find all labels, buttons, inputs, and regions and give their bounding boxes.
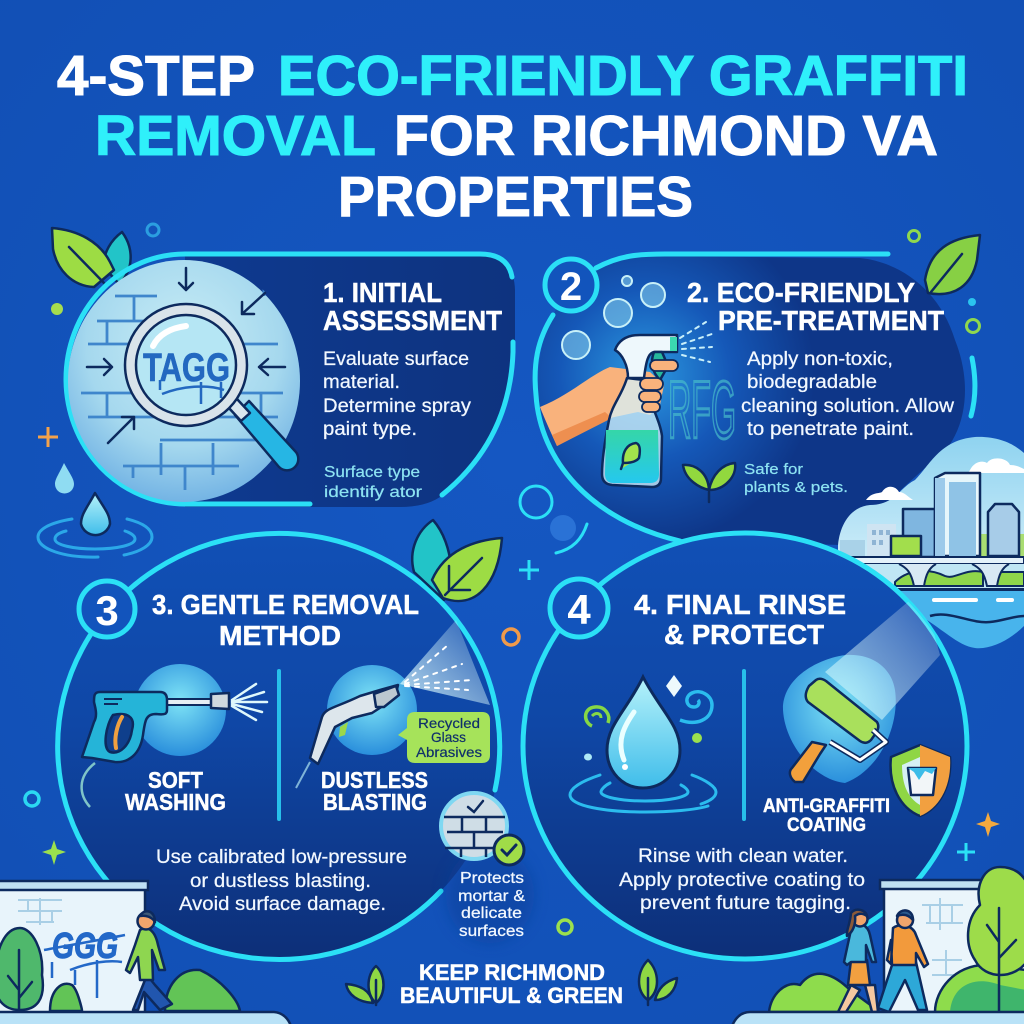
- icon: sprout: [683, 463, 735, 502]
- title: 4-STEP: [57, 44, 255, 108]
- bushes: [50, 970, 240, 1011]
- heading: 4. FINAL RINSE: [634, 589, 846, 620]
- decorative icons: rings, dots and sparkles: [25, 224, 1000, 934]
- heading: 2. ECO-FRIENDLY: [687, 277, 915, 308]
- wall: [0, 881, 148, 1014]
- person with ponytail: [838, 910, 878, 1012]
- panel outline: [535, 254, 975, 541]
- slogan text: BEAUTIFUL & GREEN: [400, 983, 623, 1008]
- graffiti tag in lens: TAGG: [143, 346, 230, 390]
- clean wall: [880, 880, 1024, 1012]
- body text: Use calibrated low-pressure: [156, 847, 407, 868]
- body text: cleaning solution. Allow: [741, 396, 954, 417]
- panel: step 2 eco-friendly pre-treatment: RFG: [668, 365, 736, 456]
- wall graffiti: GGG: [52, 925, 118, 966]
- callout: protects mortar and delicate surfaces: [441, 793, 534, 943]
- callout: protects mortar and delicate surfaces: surfaces: [459, 923, 524, 940]
- body text: Determine spray: [323, 396, 472, 417]
- body text: [619, 846, 865, 914]
- panel outline: [66, 254, 513, 504]
- scene: left graffiti wall with walker: [0, 881, 291, 1024]
- body text: biodegradable: [747, 372, 877, 393]
- panel outline: [523, 533, 967, 959]
- method labels: WASHING: [125, 789, 226, 815]
- method labels: SOFT: [148, 767, 203, 793]
- icon: soft washing pressure gun: [82, 664, 267, 807]
- slogan text: KEEP RICHMOND: [419, 960, 605, 985]
- icon: water drops and ripples: [38, 463, 152, 557]
- body text: Evaluate surface: [323, 349, 469, 370]
- badge: number 3: 3: [95, 587, 119, 634]
- panel background: [58, 533, 500, 959]
- coating label: COATING: [787, 815, 866, 836]
- badge: number 2: 2: [560, 265, 582, 309]
- panel: step 3 gentle removal method: [58, 533, 500, 959]
- heading: 3. GENTLE REMOVAL: [152, 589, 419, 620]
- callout text: Surface type: [324, 464, 420, 481]
- callout: protects mortar and delicate surfaces: Protects: [460, 870, 524, 887]
- body text: Avoid surface damage.: [179, 894, 386, 915]
- person walking: [126, 911, 172, 1010]
- scene: right clean wall with walkers: [732, 867, 1024, 1024]
- title: [57, 44, 968, 229]
- heading: [687, 277, 944, 336]
- callout text: plants & pets.: [744, 479, 848, 496]
- tree: [0, 928, 43, 1010]
- callout text: [744, 461, 848, 496]
- panel outline: [58, 533, 500, 959]
- method labels: [125, 767, 428, 815]
- body text: or dustless blasting.: [190, 871, 371, 892]
- body text: Apply non-toxic,: [747, 349, 893, 370]
- heading: 1. INITIAL: [323, 277, 442, 308]
- body text: prevent future tagging.: [640, 893, 851, 914]
- ground: [732, 1012, 1024, 1024]
- badge: number 3: [79, 581, 135, 637]
- body text: [323, 349, 472, 440]
- panel background: [185, 254, 515, 507]
- panel background: [523, 533, 967, 959]
- slogan text: [400, 960, 623, 1008]
- body text: to penetrate paint.: [747, 419, 914, 440]
- badge: number 2: [545, 259, 597, 311]
- callout: recycled glass abrasives: Recycled: [418, 715, 480, 731]
- leaves near step 3: [412, 520, 502, 601]
- heading: [152, 589, 419, 651]
- icon: brick wall circle with magnifier: [68, 260, 300, 502]
- icon: left sprout: [346, 966, 384, 1005]
- panel: step 4 final rinse and protect: [523, 533, 967, 959]
- icon: right sprout: [639, 960, 677, 1005]
- callout: recycled glass abrasives: Glass: [431, 729, 466, 745]
- icon: soap bubbles: [562, 276, 665, 359]
- badge: number 4: 4: [567, 586, 591, 633]
- leaf near step 2: [925, 235, 980, 294]
- heading: & PROTECT: [664, 619, 824, 650]
- body text: [741, 349, 954, 440]
- title: PROPERTIES: [338, 165, 693, 229]
- icon: water drop with ripples: [570, 675, 716, 812]
- icon: dustless blasting nozzle: [296, 620, 490, 788]
- body text: material.: [323, 372, 400, 393]
- callout: protects mortar and delicate surfaces: delicate: [461, 905, 522, 922]
- callout: recycled glass abrasives: [398, 712, 490, 763]
- scene: Richmond skyline, bridge and river: [820, 437, 1024, 648]
- callout text: Safe for: [744, 461, 803, 478]
- callout text: identify ator: [324, 484, 423, 501]
- ground: [0, 1012, 291, 1024]
- divider: [277, 669, 281, 821]
- title: REMOVAL: [95, 104, 376, 168]
- person in orange: [878, 910, 928, 1012]
- divider: [742, 669, 746, 821]
- heading: METHOD: [219, 620, 341, 651]
- callout: protects mortar and delicate surfaces: mortar &: [458, 888, 526, 905]
- wall graffiti: [44, 925, 125, 998]
- icon: hand and spray bottle: [540, 322, 712, 487]
- panel background: [538, 256, 965, 545]
- bushes: [769, 965, 1024, 1012]
- footer slogan: [346, 960, 677, 1008]
- title: ECO-FRIENDLY GRAFFITI: [278, 44, 968, 108]
- panel: step 2 eco-friendly pre-treatment: [535, 254, 975, 545]
- body text: Apply protective coating to: [619, 870, 865, 891]
- callout: recycled glass abrasives: Abrasives: [416, 744, 482, 760]
- heading: PRE-TREATMENT: [718, 305, 944, 336]
- tree: [968, 867, 1024, 1012]
- heading: ASSESSMENT: [323, 305, 502, 336]
- icon: paint roller with protective beam: [783, 590, 950, 816]
- method labels: BLASTING: [323, 789, 427, 815]
- body text: [156, 847, 407, 915]
- title: FOR RICHMOND VA: [394, 104, 938, 168]
- coating label: ANTI-GRAFFITI: [763, 796, 890, 817]
- method labels: DUSTLESS: [321, 767, 428, 793]
- panel: step 1 initial assessment: [66, 254, 515, 507]
- heading: [323, 277, 502, 336]
- callout text: [324, 464, 423, 501]
- body text: Rinse with clean water.: [638, 846, 848, 867]
- coating label: [763, 796, 890, 836]
- heading: [634, 589, 846, 650]
- body text: paint type.: [323, 419, 417, 440]
- leaves near step 1: [52, 228, 131, 287]
- badge: number 4: [550, 579, 608, 637]
